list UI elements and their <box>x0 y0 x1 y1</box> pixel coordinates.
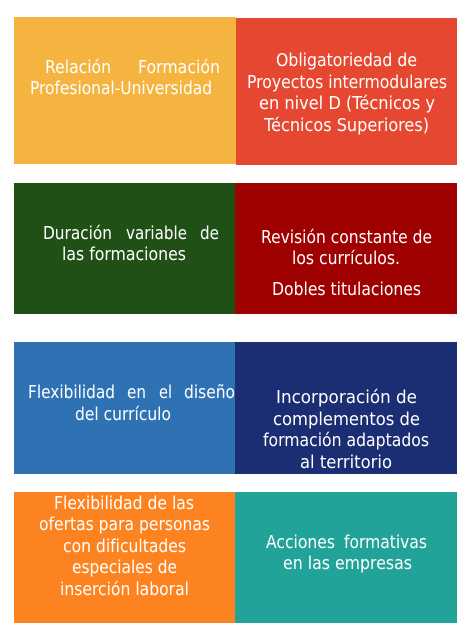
panel: Revisión constante de los currículos. Dobles titulaciones <box>235 183 457 314</box>
panel: Flexibilidad en el diseño del currículo: del currículo <box>75 405 171 425</box>
panel: Incorporación de complementos de formación adaptados al territorio: al territorio <box>300 453 392 473</box>
panel: Flexibilidad en el diseño del currículo: el <box>159 383 172 403</box>
panel: Flexibilidad en el diseño del currículo <box>14 342 235 474</box>
panel: Acciones formativas en las empresas <box>235 492 457 623</box>
panel: Obligatoriedad de Proyectos intermodulares: Proyectos intermodulares <box>247 73 447 93</box>
panel: Acciones formativas en las empresas: formativas <box>344 533 427 553</box>
panel: Flexibilidad de las ofertas para personas con dificultades: con dificultades <box>63 537 186 557</box>
panel: Incorporación de complementos de formación adaptados al territorio: Incorporación de <box>276 388 417 408</box>
panel: Duración variable de las formaciones: Duración <box>43 224 112 244</box>
panel: Relación Formación Profesional-Universidad: Profesional-Universidad <box>30 79 212 99</box>
panel: Flexibilidad de las ofertas para personas con dificultades: Flexibilidad de las <box>54 494 194 514</box>
panel: Relación Formación Profesional-Universidad: Relación <box>45 58 111 78</box>
panel: Flexibilidad de las ofertas para personas con dificultades: inserción laboral <box>60 580 189 600</box>
panel: Flexibilidad de las ofertas para personas con dificultades: ofertas para personas <box>39 515 210 535</box>
panel: Duración variable de las formaciones: de <box>200 224 219 244</box>
panel: Acciones formativas en las empresas: en las empresas <box>283 554 412 574</box>
panel: Obligatoriedad de Proyectos intermodulares: en nivel D (Técnicos y <box>259 94 435 114</box>
panel: Incorporación de complementos de formación adaptados al territorio: complementos de <box>273 410 420 430</box>
panel: Relación Formación Profesional-Universidad <box>14 17 236 164</box>
panel: Obligatoriedad de Proyectos intermodulares: Técnicos Superiores) <box>263 116 429 136</box>
panel: Revisión constante de los currículos. Dobles titulaciones: Dobles titulaciones <box>272 280 421 300</box>
panel: Flexibilidad en el diseño del currículo: Flexibilidad <box>28 383 115 403</box>
panel: Acciones formativas en las empresas: Acciones <box>266 533 335 553</box>
panel: Revisión constante de los currículos. Dobles titulaciones: los currículos. <box>292 249 400 269</box>
panel: Obligatoriedad de Proyectos intermodulares <box>236 18 457 165</box>
panel: Incorporación de complementos de formación adaptados al territorio <box>235 342 457 474</box>
panel: Revisión constante de los currículos. Dobles titulaciones: Revisión constante de <box>261 228 432 248</box>
panel: Flexibilidad en el diseño del currículo: en <box>127 383 146 403</box>
panel: Flexibilidad de las ofertas para personas con dificultades: especiales de <box>72 558 177 578</box>
panel: Flexibilidad en el diseño del currículo: diseño <box>184 383 235 403</box>
panel: Duración variable de las formaciones: las formaciones <box>62 245 186 265</box>
panel: Duración variable de las formaciones <box>14 183 235 314</box>
panel: Obligatoriedad de Proyectos intermodulares: Obligatoriedad de <box>276 51 417 71</box>
panel: Flexibilidad de las ofertas para personas con dificultades <box>14 492 235 623</box>
panel: Incorporación de complementos de formación adaptados al territorio: formación adaptados <box>263 431 429 451</box>
panel: Relación Formación Profesional-Universidad: Formación <box>138 58 220 78</box>
panel: Duración variable de las formaciones: variable <box>126 224 187 244</box>
